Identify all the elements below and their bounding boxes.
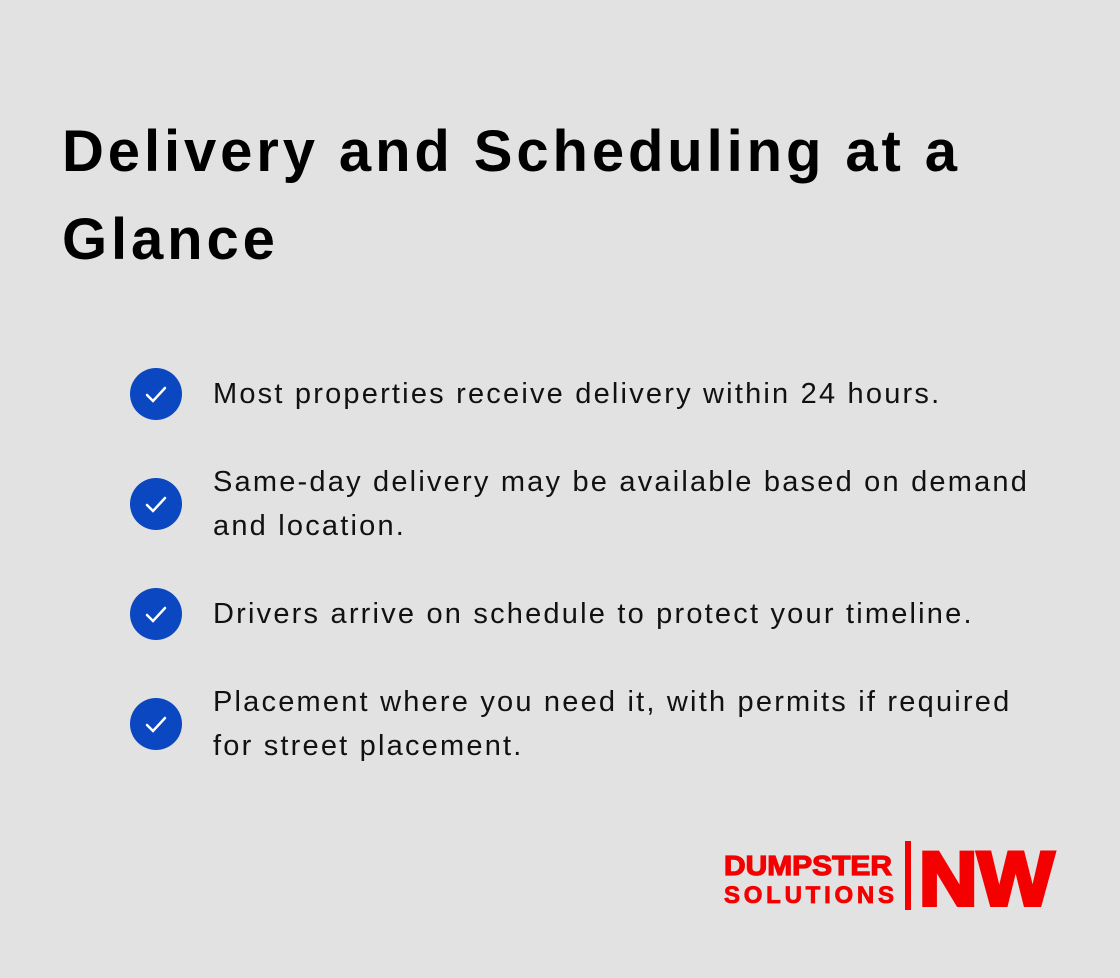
text: Drivers arrive on schedule to protect your timeline. [213, 598, 974, 630]
icon: check [130, 368, 182, 420]
title: Glance [62, 207, 279, 272]
item 2 [130, 466, 1029, 542]
icon: check [130, 588, 182, 640]
logo: SOLUTIONS [724, 882, 894, 909]
item 1 [130, 368, 941, 420]
text: Same-day delivery may be available based on demand [213, 466, 1029, 498]
text: Most properties receive delivery within 24 hours. [213, 378, 941, 410]
title [62, 119, 961, 272]
item 3 [130, 588, 974, 640]
text: and location. [213, 510, 406, 542]
text [213, 686, 1011, 762]
logo [724, 838, 1057, 914]
icon: check [130, 698, 182, 750]
icon: check [130, 478, 182, 530]
title: Delivery and Scheduling at a [62, 119, 961, 184]
text: Placement where you need it, with permits if required [213, 686, 1011, 718]
text: for street placement. [213, 730, 524, 762]
logo: DUMPSTER [724, 850, 892, 881]
text [213, 466, 1029, 542]
item 4 [130, 686, 1011, 762]
